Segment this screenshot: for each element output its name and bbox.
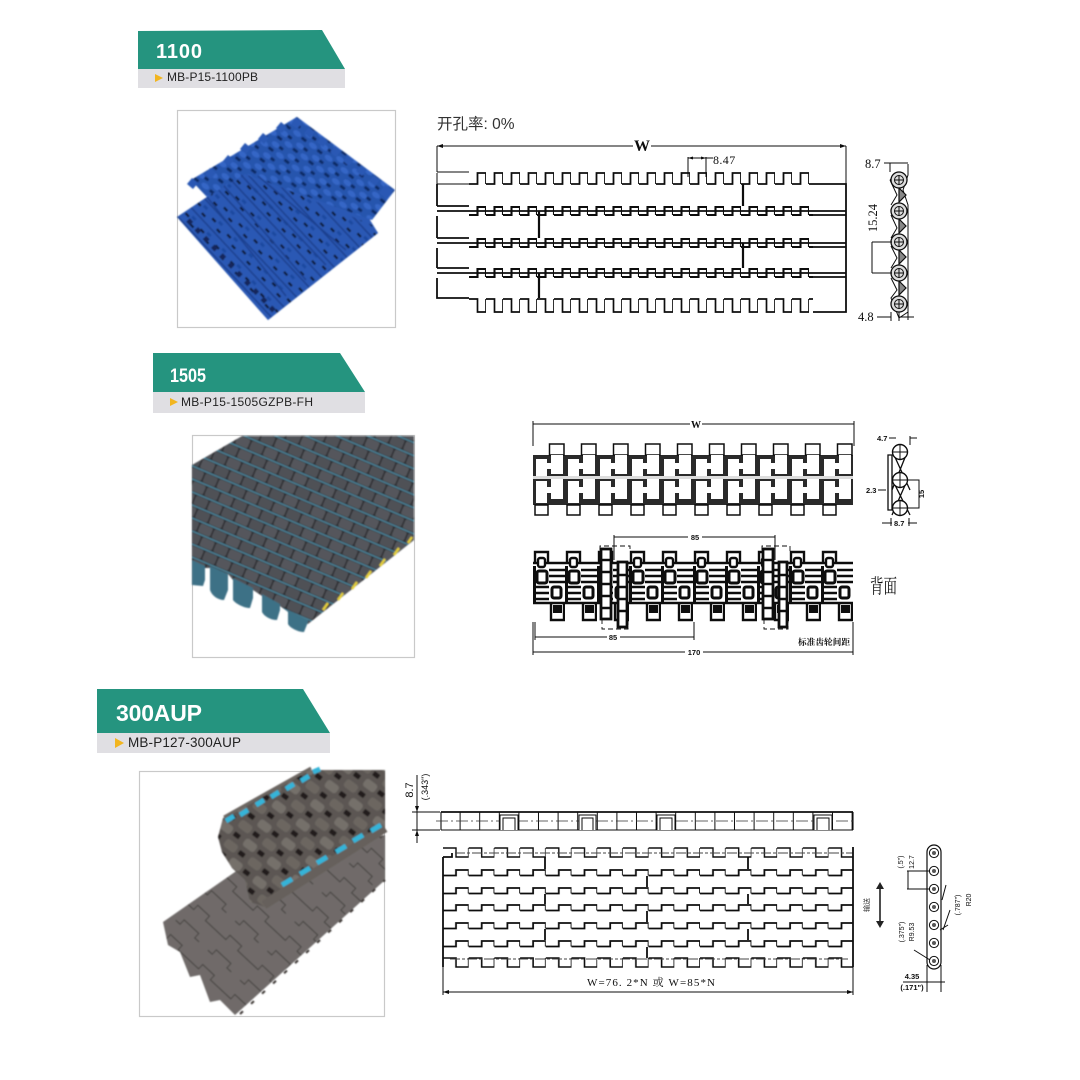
photo frame <box>178 110 396 328</box>
banner: 300AUP <box>97 689 330 753</box>
dimension 12.7: 12.7 <box>909 855 916 869</box>
panel: photo of grey belts <box>140 768 385 1016</box>
label: open area ratio: 开孔率: 0% <box>437 115 515 133</box>
grey subtitle bar <box>138 69 345 88</box>
panel: photo of dark belt <box>192 436 414 658</box>
banner: 1505 <box>153 353 365 413</box>
dimension 85 upper: 85 <box>691 533 699 542</box>
drawing: 300AUP belt side view <box>898 845 973 992</box>
width dimension <box>443 967 853 995</box>
link chain <box>927 845 941 969</box>
dimension 12.7 <box>898 855 930 889</box>
green title shape <box>153 353 365 392</box>
icon: yellow arrow <box>115 738 124 748</box>
belt pattern <box>533 443 853 516</box>
width dimension W: W <box>691 420 701 431</box>
thickness dimension: (.343") <box>420 774 430 800</box>
dimension 4.35: 4.35 <box>905 972 919 981</box>
belt pattern <box>533 549 853 622</box>
photo frame <box>192 436 414 658</box>
dimension 85 lower <box>535 622 694 642</box>
icon: yellow arrow <box>170 398 178 406</box>
dimension 170 <box>533 622 853 657</box>
dimension 8.7 <box>865 157 908 172</box>
link chain <box>890 164 908 320</box>
dimension R9.53 <box>899 922 930 960</box>
dimension 85 upper <box>614 533 775 560</box>
width dimension W <box>437 138 846 184</box>
grey subtitle bar <box>153 392 365 413</box>
photo frame <box>140 772 384 1016</box>
model code: MB-P127-300AUP <box>128 735 241 750</box>
dimension R20 <box>940 885 973 930</box>
icon: travel direction arrow <box>862 882 884 928</box>
drawing: 1505 belt side view <box>866 434 926 528</box>
model code: MB-P15-1505GZPB-FH <box>181 395 313 409</box>
dimension 4.7: 4.7 <box>877 434 887 443</box>
drawing: 300AUP belt top view <box>443 847 853 995</box>
blue belt illustration <box>177 117 395 320</box>
dimension 15.24 <box>866 203 892 273</box>
dimension R20: R20 <box>966 893 973 906</box>
grey belts illustration <box>163 768 385 1015</box>
drawing: 1505 belt top view <box>533 420 854 516</box>
drawing: 1100 belt side view <box>858 157 914 324</box>
dimension 4.8: 4.8 <box>858 310 874 324</box>
note: standard sprocket spacing: 标准齿轮间距 <box>798 636 850 647</box>
dimension 12.7: (.5") <box>898 856 905 868</box>
green title shape <box>138 30 345 69</box>
sprocket slots <box>600 546 790 629</box>
dimension R9.53: (.375") <box>899 922 906 942</box>
drawing: 1505 belt back view <box>533 533 897 657</box>
model code: MB-P15-1100PB <box>167 70 258 84</box>
belt outline <box>437 172 846 313</box>
thickness dimension <box>404 774 440 843</box>
pitch dimension 8.47: 8.47 <box>713 153 736 167</box>
dimension 4.8 <box>858 310 914 324</box>
dimension 8.7: 8.7 <box>894 519 904 528</box>
grey subtitle bar <box>97 733 330 753</box>
link chain <box>888 444 910 516</box>
dimension 4.35: (.171") <box>900 983 924 992</box>
width dimension W: W <box>634 138 650 155</box>
pitch dimension 8.47 <box>688 153 736 177</box>
dimension 2.3: 2.3 <box>866 486 876 495</box>
dimension 85 lower: 85 <box>609 633 617 642</box>
belt outline <box>443 847 853 968</box>
title: 1100: 1100 <box>156 41 202 63</box>
width dimension: W=76. 2*N 或 W=85*N <box>587 976 715 989</box>
width dimension W <box>533 420 854 446</box>
dimension R9.53: R9.53 <box>909 923 916 941</box>
title: 1505: 1505 <box>170 366 206 387</box>
icon: travel direction arrow: 输送 <box>862 898 871 912</box>
dimension R20: (.787") <box>955 895 962 915</box>
icon: yellow arrow <box>155 74 163 82</box>
dimension 4.35 <box>900 965 945 992</box>
title: 300AUP: 300AUP <box>116 700 202 726</box>
dimension 15: 15 <box>917 490 926 498</box>
drawing: 1100 belt top view <box>437 115 846 313</box>
dark belt illustration <box>192 436 414 632</box>
dimension 15.24: 15.24 <box>866 203 880 232</box>
green title shape <box>97 689 330 733</box>
edge strip <box>436 812 853 830</box>
thickness dimension: 8.7 <box>404 782 416 798</box>
drawing: 300AUP belt edge view <box>404 774 853 843</box>
dimension 170: 170 <box>688 648 700 657</box>
panel: photo of blue belt <box>177 110 396 328</box>
dimension 8.7: 8.7 <box>865 157 881 171</box>
banner: 1100 <box>138 30 345 88</box>
label: back side: 背面 <box>870 575 897 598</box>
